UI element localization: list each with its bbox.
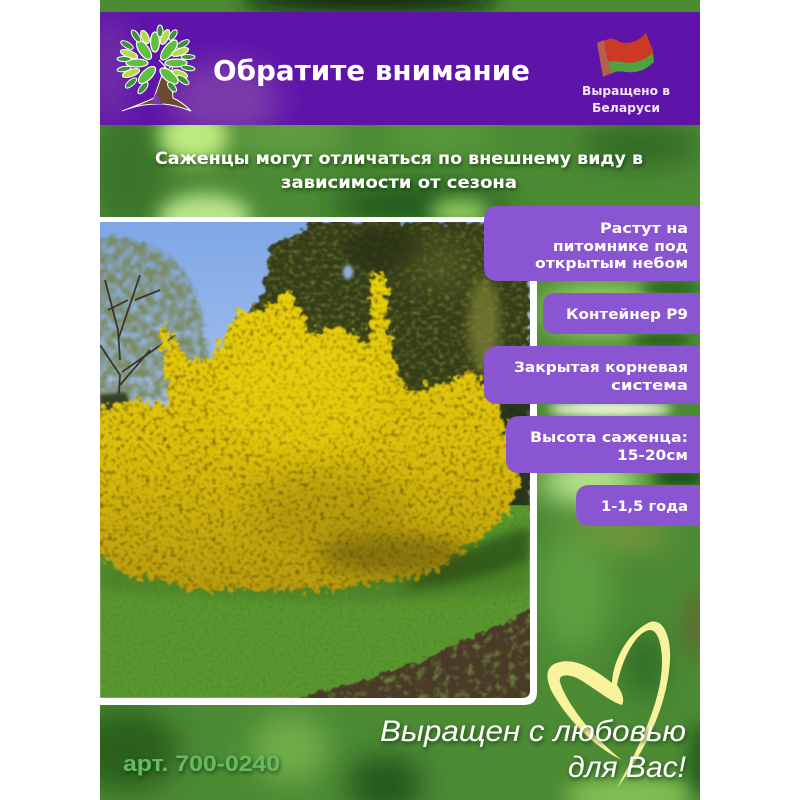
flag caption: Выращено в [582, 83, 670, 98]
photo: flowering forsythia bush [92, 222, 537, 702]
notice text [155, 149, 643, 193]
tag: age [576, 485, 700, 526]
tag: outdoor growing: Растут на [600, 221, 688, 237]
tag: height [506, 416, 700, 473]
icon: Belarus flag [597, 33, 654, 77]
tag: height: 15-20см [617, 448, 688, 464]
header band [100, 12, 700, 125]
slogan: для Вас! [568, 751, 687, 784]
tag: closed root system: система [611, 378, 688, 394]
bush [92, 270, 522, 590]
icon: tree logo [117, 25, 195, 111]
flag caption [583, 86, 670, 114]
tag: outdoor growing [484, 206, 700, 281]
soil [292, 608, 530, 698]
tag: age: 1-1,5 года [601, 499, 688, 515]
grass [100, 505, 530, 698]
tag: outdoor growing: открытым небом [535, 256, 688, 272]
slogan [380, 715, 687, 784]
article number: арт. 700-0240 [123, 751, 280, 776]
flag caption: Беларуси [592, 100, 660, 115]
tag: closed root system [484, 346, 700, 404]
sky [100, 222, 530, 416]
tag: outdoor growing: питомнике под [553, 239, 688, 255]
slogan: Выращен с любовью [380, 715, 686, 748]
notice text: Саженцы могут отличаться по внешнему виду в [155, 149, 643, 169]
info tags [484, 206, 700, 526]
tag: container: Контейнер Р9 [566, 307, 688, 323]
notice text: зависимости от сезона [281, 173, 517, 193]
tag: container [543, 293, 700, 334]
icon: heart outline [547, 622, 670, 788]
title: Обратите внимание [213, 54, 530, 87]
conifers [227, 222, 530, 535]
photo frame [100, 217, 537, 705]
tag: closed root system: Закрытая корневая [514, 360, 688, 376]
bare tree [96, 236, 209, 425]
tag: height: Высота саженца: [530, 430, 688, 446]
